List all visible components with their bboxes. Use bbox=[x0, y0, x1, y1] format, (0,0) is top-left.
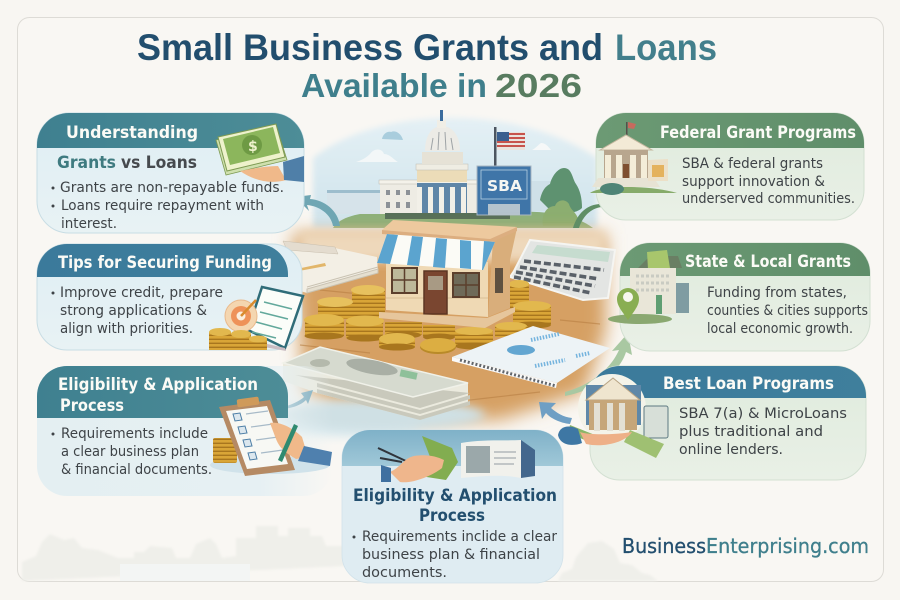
text: federal body bbox=[682, 156, 855, 207]
subheading: Grants vs Loans: Grants bbox=[57, 153, 116, 172]
heading: Understanding: Understanding bbox=[66, 123, 198, 143]
text: federal body: support innovation & bbox=[682, 174, 825, 190]
notebook bbox=[452, 326, 610, 388]
skyline backdrop bbox=[22, 526, 658, 581]
text: requirements bullets: & financial documents. bbox=[61, 462, 212, 478]
icon: cash in hand bbox=[216, 124, 304, 182]
arrow: to best loan bbox=[539, 402, 572, 424]
heading: Tips for Securing Funding: Tips for Securing Funding bbox=[58, 253, 272, 273]
heading: Eligibility & Application Process: Process bbox=[419, 506, 485, 525]
text: requirements bullets bbox=[352, 529, 557, 581]
title: Available in bbox=[301, 67, 487, 104]
central illustration: wooden table bbox=[280, 232, 606, 437]
icon: federal building bbox=[590, 122, 677, 195]
heading: State & Local Grants: State & Local Grants bbox=[685, 252, 851, 272]
calculator bbox=[510, 240, 615, 300]
text: requirements bullets bbox=[52, 426, 212, 478]
coin stacks bbox=[304, 280, 551, 354]
heading: Federal Grant Programs: Federal Grant Programs bbox=[660, 123, 856, 143]
heading: Eligibility & Application Process: Process bbox=[60, 396, 124, 416]
icon: target, checklist and coins bbox=[209, 287, 303, 351]
text: loan programs body: SBA 7(a) & MicroLoans bbox=[679, 406, 847, 422]
text: federal body: underserved communities. bbox=[682, 191, 855, 207]
panel: Eligibility & Application Process (center) bbox=[342, 430, 563, 583]
website brand: Enterprising.com bbox=[706, 534, 869, 558]
panel: Understanding Grants vs Loans bbox=[37, 113, 304, 233]
arrow: to understanding bbox=[295, 195, 340, 226]
text: requirements bullets: Requirements include bbox=[61, 426, 208, 442]
website brand: Business bbox=[622, 534, 706, 558]
text: state and local body bbox=[707, 285, 868, 337]
text: state and local body: Funding from states, bbox=[707, 285, 847, 301]
heading: Best Loan Programs: Best Loan Programs bbox=[663, 374, 834, 394]
text: grants vs loans bullets bbox=[52, 180, 284, 232]
text: federal body: SBA & federal grants bbox=[682, 156, 823, 172]
heading: Eligibility & Application Process bbox=[353, 486, 557, 525]
heading: Eligibility & Application Process: Eligibility & Application bbox=[353, 486, 557, 505]
text: loan programs body bbox=[679, 406, 847, 458]
text: grants vs loans bullets: Grants are non-repayable funds. bbox=[60, 180, 284, 196]
storefront bbox=[377, 220, 517, 328]
icon: clipboard and pen bbox=[210, 397, 332, 476]
icon: hand signing and cash bbox=[378, 436, 458, 482]
text: requirements bullets: business plan & financial bbox=[362, 547, 540, 563]
text: grants vs loans bullets: interest. bbox=[61, 216, 117, 232]
SBA sign: SBA bbox=[487, 177, 522, 195]
text: state and local body: local economic growth. bbox=[707, 321, 853, 337]
text: tips body bbox=[52, 285, 223, 337]
heading: Eligibility & Application Process: Eligibility & Application bbox=[58, 375, 258, 395]
title: 2026 bbox=[495, 67, 582, 104]
panel: Tips for Securing Funding bbox=[37, 244, 303, 351]
panel: Best Loan Programs bbox=[558, 366, 866, 480]
panel: Eligibility & Application Process (left) bbox=[37, 366, 333, 496]
arrow: from eligibility bbox=[274, 390, 313, 409]
heading: Eligibility & Application Process bbox=[58, 375, 258, 416]
text: state and local body: counties & cities supports bbox=[707, 303, 868, 319]
icon: city building, cash and map pin bbox=[608, 250, 689, 324]
text: tips body: strong applications & bbox=[60, 303, 207, 319]
text: requirements bullets: Requirements inclide a clear bbox=[362, 529, 557, 545]
central illustration: government buildings scene bbox=[313, 110, 597, 228]
arrow: to federal grants bbox=[573, 197, 611, 228]
text: tips body: Improve credit, prepare bbox=[60, 285, 223, 301]
skyline water strip bbox=[120, 564, 250, 581]
text: grants vs loans bullets: Loans require repayment with bbox=[61, 198, 264, 214]
title: Small Business Grants and bbox=[137, 27, 603, 68]
text: tips body: align with priorities. bbox=[60, 321, 193, 337]
SBA sign bbox=[477, 127, 531, 215]
arrow: to state and local bbox=[565, 333, 632, 396]
subheading: Grants vs Loans bbox=[57, 153, 197, 172]
panel: State & Local Grants bbox=[608, 243, 870, 351]
icon: bank and cash in hand bbox=[558, 374, 668, 458]
text: loan programs body: plus traditional and bbox=[679, 424, 823, 440]
website brand bbox=[622, 534, 869, 558]
subheading: Grants vs Loans: vs Loans bbox=[121, 153, 197, 172]
panel: Federal Grant Programs bbox=[590, 113, 864, 220]
text: requirements bullets: a clear business plan bbox=[61, 444, 199, 460]
money stack bbox=[275, 347, 485, 431]
text: loan programs body: online lenders. bbox=[679, 442, 783, 458]
title: Loans bbox=[615, 27, 717, 68]
icon: cash in hand: $ bbox=[248, 139, 258, 155]
title bbox=[137, 27, 717, 104]
icon: brochure bbox=[461, 440, 535, 478]
text: requirements bullets: documents. bbox=[362, 565, 447, 581]
